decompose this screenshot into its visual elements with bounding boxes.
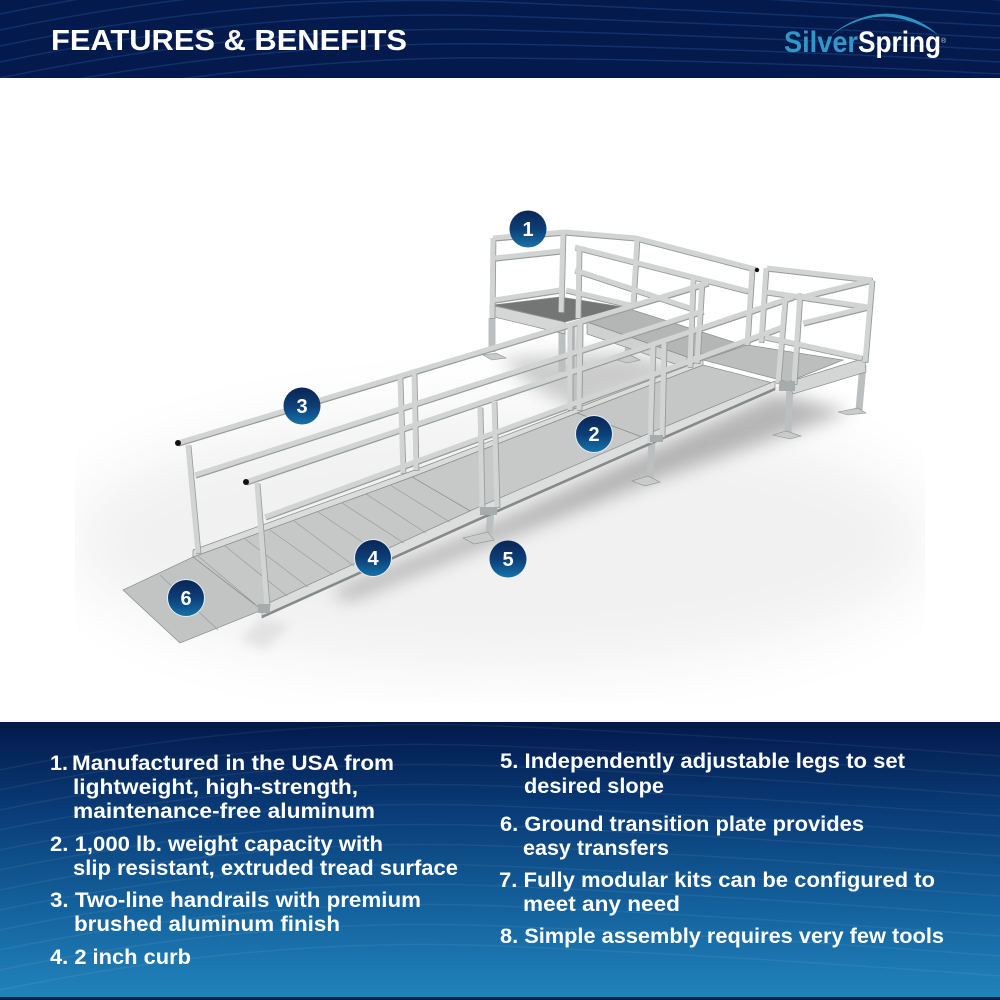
side curb xyxy=(262,381,775,616)
item 5 xyxy=(500,749,905,798)
top landing xyxy=(493,297,623,322)
item 3: 3. Two-line handrails with premium xyxy=(50,888,421,912)
ramp brackets xyxy=(258,381,795,613)
item 1: 1. xyxy=(50,751,68,775)
item 2: slip resistant, extruded tread surface xyxy=(73,856,458,880)
badge 4 xyxy=(354,540,392,576)
legs and feet xyxy=(463,318,866,544)
item 7: 7. Fully modular kits can be configured to xyxy=(499,868,935,892)
item 5: desired slope xyxy=(524,774,664,798)
item 6: 6. Ground transition plate provides xyxy=(500,812,864,836)
transition plate xyxy=(123,557,262,643)
feature list: right column xyxy=(499,749,944,948)
badge 1 xyxy=(510,210,546,248)
handrails xyxy=(175,232,873,613)
badge 3: 3 xyxy=(296,396,308,418)
badge 6: 6 xyxy=(180,588,192,610)
logo: SilverSpring: ® xyxy=(941,37,947,45)
ramp section 1 with tread xyxy=(193,477,472,610)
ramp section 2 xyxy=(412,413,645,512)
badge 5: 5 xyxy=(502,549,514,571)
badge 6 xyxy=(168,580,204,616)
item 1: Manufactured in the USA from xyxy=(72,751,394,775)
item 6: easy transfers xyxy=(523,836,669,860)
footer panel xyxy=(0,722,1000,1000)
item 5: 5. Independently adjustable legs to set xyxy=(500,749,905,773)
ramp shadows xyxy=(240,352,850,650)
item 3: brushed aluminum finish xyxy=(74,912,340,936)
badge 5 xyxy=(490,540,526,578)
header band xyxy=(0,0,1000,78)
item 1: lightweight, high-strength, xyxy=(73,775,358,799)
badge 1: 1 xyxy=(522,219,534,241)
title: FEATURES & BENEFITS xyxy=(51,25,407,57)
badge 2 xyxy=(576,416,612,452)
feature list: left column xyxy=(50,751,458,969)
item 7: meet any need xyxy=(523,892,680,916)
rear curb xyxy=(193,360,703,557)
item 1: maintenance-free aluminum xyxy=(73,799,375,823)
item 3 xyxy=(50,888,421,936)
item 2: 2. 1,000 lb. weight capacity with xyxy=(50,832,383,856)
ramp section 3 xyxy=(577,365,773,438)
badge 4: 4 xyxy=(367,548,379,570)
upper ramp xyxy=(587,307,743,357)
item 4: 4. 2 inch curb xyxy=(50,945,191,969)
item 7 xyxy=(499,868,935,916)
logo: SilverSpring xyxy=(784,14,947,59)
item 1 xyxy=(50,751,394,823)
logo: SilverSpring: Spring xyxy=(858,26,941,59)
callout badges xyxy=(168,210,612,616)
decks xyxy=(123,297,866,643)
item 8: 8. Simple assembly requires very few tools xyxy=(500,924,944,948)
badge 3 xyxy=(284,388,320,424)
rail end caps xyxy=(175,268,759,485)
ramp illustration xyxy=(70,232,930,670)
right landing xyxy=(703,345,843,382)
item 2 xyxy=(50,832,458,880)
badge 2: 2 xyxy=(588,424,600,446)
item 6 xyxy=(500,812,864,860)
logo: SilverSpring: Silver xyxy=(784,26,858,59)
floor shading xyxy=(70,410,930,670)
